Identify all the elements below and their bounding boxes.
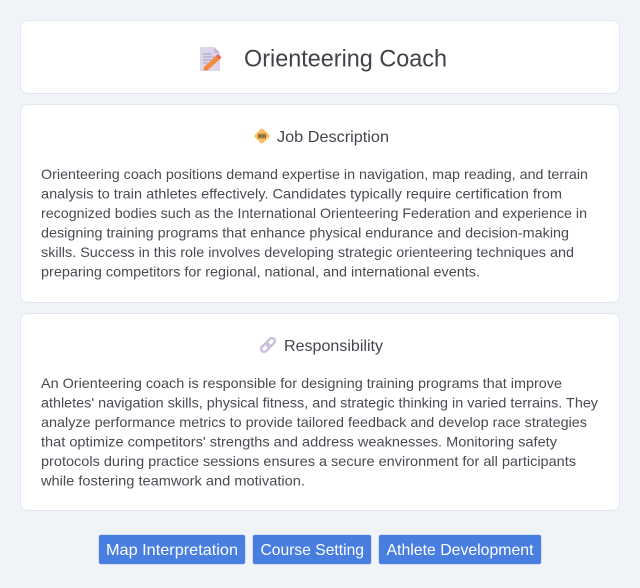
tag: map interpretation: Map Interpretation [106, 542, 238, 559]
text block: job description: recognized bodies such as the International Orienteering Federation and experience in [41, 205, 587, 221]
text block: responsibility: protocols during practice sessions ensures a secure environment for all participants [41, 453, 576, 469]
text block: job description: skills. Success in this role involves developing strategic orienteering techniques and [41, 244, 574, 260]
tag: map interpretation [98, 534, 246, 565]
text block: responsibility: An Orienteering coach is responsible for designing training programs that improve [41, 375, 562, 391]
tag: course setting [252, 534, 372, 565]
text block: job description: Orienteering coach positions demand expertise in navigation, map reading, and terrain [41, 166, 588, 182]
text block: responsibility: athletes' navigation skills, physical fitness, and strategic thinking in varied terrains. They [41, 394, 598, 410]
panel: job description [20, 104, 620, 303]
panel: title card [20, 20, 620, 94]
panel: responsibility [20, 313, 620, 511]
tag: course setting: Course Setting [260, 542, 364, 559]
text block: job description: designing training programs that enhance physical endurance and decision-making [41, 224, 569, 240]
tag: athlete development: Athlete Development [386, 542, 534, 559]
text block: responsibility: that optimize competitors' strengths and address weaknesses. Monitoring safety [41, 434, 557, 450]
text block: job description [41, 166, 588, 280]
icon: document with pencil [200, 47, 222, 71]
heading: responsibility: Responsibility [284, 338, 383, 355]
icon: chain link [260, 336, 276, 354]
text block: job description: analysis to train athletes effectively. Candidates typically require certification from [41, 186, 562, 202]
title: Orienteering Coach [244, 46, 447, 72]
icon: orange diamond sign [254, 128, 270, 144]
text block: job description: preparing competitors for regional, national, and international events. [41, 264, 480, 280]
heading: job description: Job Description [277, 129, 389, 146]
text block: responsibility: analyze performance metrics to provide tailored feedback and develop race strategies [41, 414, 587, 430]
tag: athlete development [378, 534, 542, 565]
text block: responsibility: while fostering teamwork and motivation. [40, 472, 305, 488]
